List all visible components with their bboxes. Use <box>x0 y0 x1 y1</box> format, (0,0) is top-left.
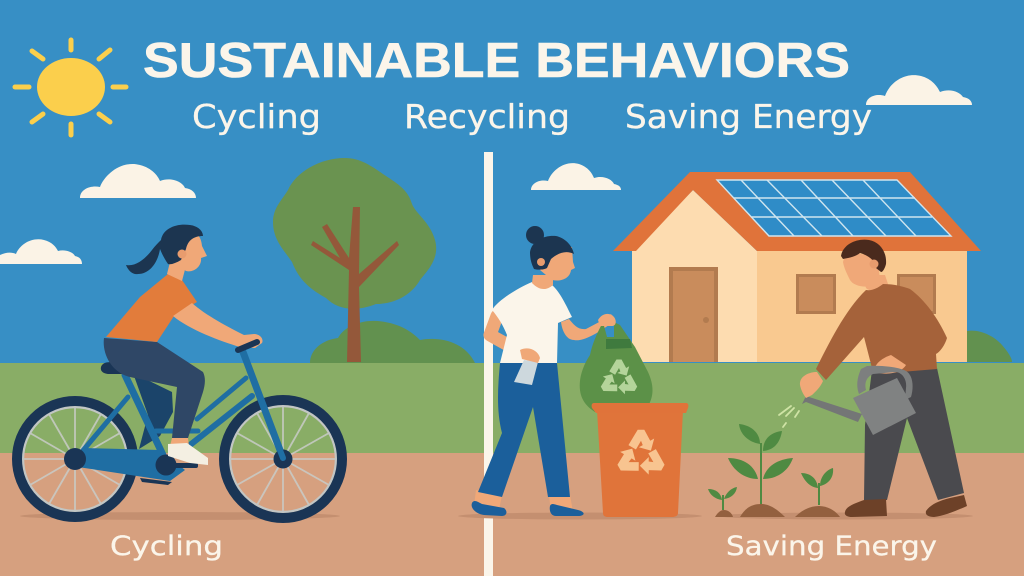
recycling woman <box>472 226 688 517</box>
cyclist arm <box>173 303 263 348</box>
roof <box>613 172 981 251</box>
house right wall <box>757 245 967 362</box>
grass <box>0 363 1024 453</box>
man hand on can <box>874 355 906 374</box>
man neck <box>862 275 889 291</box>
handlebar <box>238 342 257 350</box>
man face <box>843 254 880 287</box>
woman ear <box>537 258 545 266</box>
man hair <box>841 240 886 272</box>
sky background <box>0 0 1024 364</box>
gardening man <box>779 240 967 517</box>
chain guard <box>78 448 185 481</box>
dark trousers <box>864 368 964 500</box>
subheading: Cycling: Cycling <box>192 97 321 136</box>
window left <box>796 274 836 314</box>
hand holding bottle <box>520 348 540 363</box>
front wheel <box>224 400 342 518</box>
cloud: lower left <box>0 239 82 264</box>
title: SUSTAINABLE BEHAVIORS <box>143 34 850 88</box>
hand on bag <box>598 314 616 326</box>
woman neck <box>532 275 553 289</box>
crank and hubs <box>64 448 292 485</box>
ground path <box>0 453 1024 576</box>
woman arm left <box>490 316 526 355</box>
subheading: Saving Energy: Saving Energy <box>625 97 872 136</box>
cloud: top right <box>866 75 972 105</box>
woman arm right <box>561 314 615 340</box>
cyclist ear <box>178 250 186 258</box>
shoe <box>168 443 208 465</box>
window right <box>897 274 936 314</box>
watering can <box>802 366 916 435</box>
brown shoes <box>845 495 967 517</box>
bicycle frame <box>75 352 283 460</box>
divider line <box>484 152 493 576</box>
bicycle and cyclist <box>17 225 342 518</box>
seedlings <box>708 424 840 517</box>
icon: sun <box>15 40 126 135</box>
tree <box>273 158 436 362</box>
recycling bag <box>580 322 652 412</box>
cyclist face <box>176 230 207 271</box>
front frame hub tube <box>276 440 283 458</box>
brown sweater <box>816 284 947 380</box>
subheading: Recycling: Recycling <box>404 97 570 136</box>
man ear <box>870 260 878 268</box>
saddle <box>101 362 131 374</box>
house with solar roof <box>613 172 981 362</box>
bush behind house right <box>967 331 1012 362</box>
solar panel <box>717 180 951 236</box>
door <box>669 267 718 362</box>
house gable wall <box>632 190 757 362</box>
man lower hand <box>800 372 823 398</box>
plant leaves <box>708 424 833 500</box>
cyclist neck <box>167 262 187 281</box>
water bottle <box>514 360 538 385</box>
woman hair and bun <box>526 226 574 270</box>
caption: Cycling: Cycling <box>110 531 223 562</box>
recycling bin <box>592 403 688 517</box>
back wheel <box>17 401 133 517</box>
cloud: upper left <box>80 164 196 198</box>
bush behind tree <box>310 321 475 363</box>
bag recycle symbol <box>597 359 641 398</box>
soil mounds <box>715 504 840 517</box>
woman face <box>540 247 575 281</box>
blue trousers <box>478 363 570 497</box>
front lower leg <box>170 438 189 446</box>
cloud: centre <box>531 163 621 190</box>
caption: Saving Energy: Saving Energy <box>726 531 937 562</box>
shoes <box>472 501 584 516</box>
trailing foot skin <box>474 490 502 510</box>
leading foot skin <box>549 495 573 512</box>
rear leg <box>133 373 173 449</box>
plant stems <box>723 443 819 510</box>
front leg pants <box>104 338 205 438</box>
cyclist hair and ponytail <box>126 225 203 274</box>
white shirt <box>492 282 572 363</box>
orange shirt <box>106 274 197 342</box>
ground shadows <box>20 512 973 520</box>
bin recycle symbol <box>612 430 669 479</box>
water drops <box>779 406 799 427</box>
